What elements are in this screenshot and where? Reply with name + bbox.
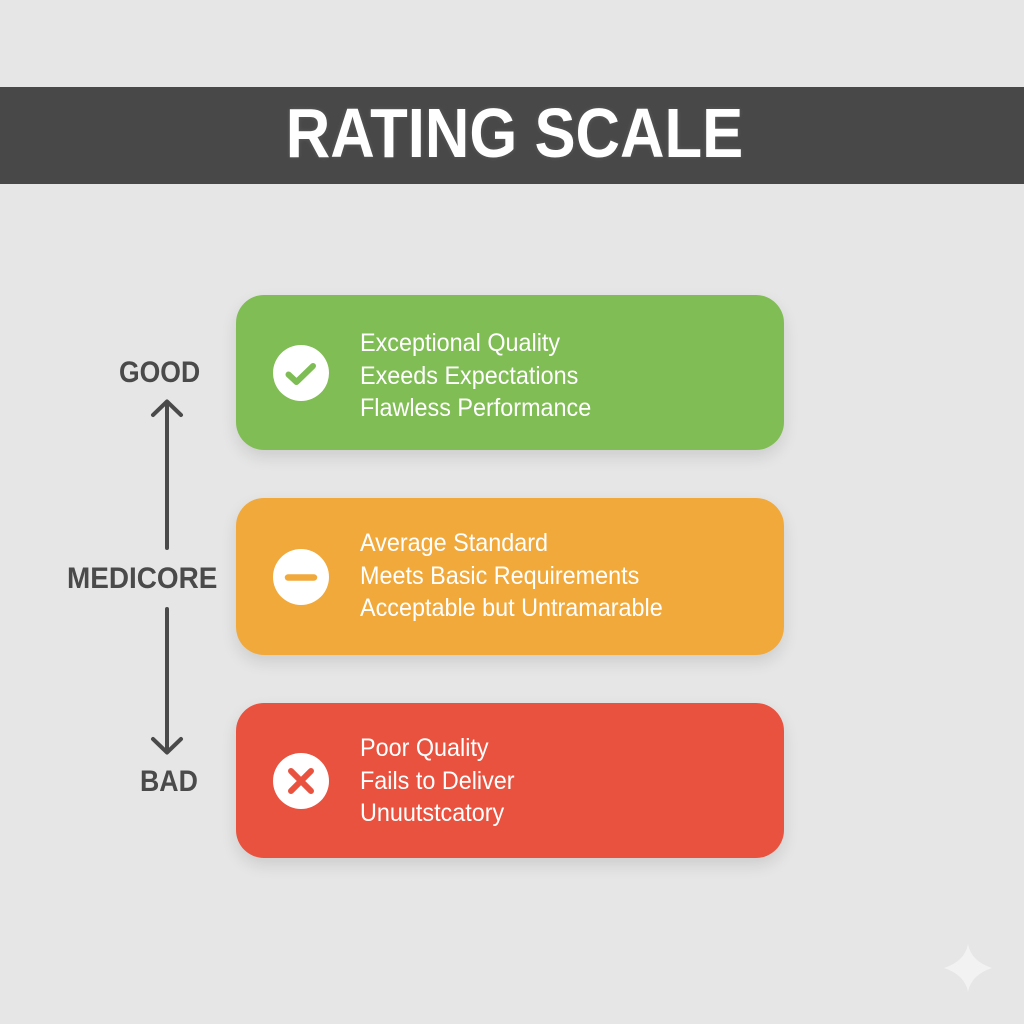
text: bad: Fails to Deliver <box>360 766 515 794</box>
text: bad: Poor Quality <box>360 734 489 762</box>
text: medicore: Meets Basic Requirements <box>360 562 639 590</box>
panel: good <box>236 295 784 450</box>
text: good: Flawless Performance <box>360 394 591 422</box>
title banner <box>0 87 1024 184</box>
arrow: up <box>150 399 184 550</box>
text: medicore: Average Standard <box>360 529 548 557</box>
text: medicore: Acceptable but Untramarable <box>360 594 663 622</box>
text: bad <box>360 734 515 827</box>
panel: medicore <box>236 498 784 655</box>
text: good: Exceptional Quality <box>360 329 560 357</box>
icon: check <box>273 345 329 401</box>
icon: minus <box>273 549 329 605</box>
text: good <box>360 329 591 422</box>
icon: cross <box>273 753 329 809</box>
text: good: Exeeds Expectations <box>360 362 578 390</box>
icon: sparkle <box>945 946 991 990</box>
label: bad: BAD <box>140 765 198 798</box>
title: RATING SCALE <box>286 94 743 172</box>
label: medicore: MEDICORE <box>67 562 217 595</box>
panel: bad <box>236 703 784 858</box>
label: good: GOOD <box>119 356 200 389</box>
text: medicore <box>360 529 663 622</box>
text: bad: Unuutstcatory <box>360 799 504 827</box>
arrow: down <box>150 607 184 755</box>
